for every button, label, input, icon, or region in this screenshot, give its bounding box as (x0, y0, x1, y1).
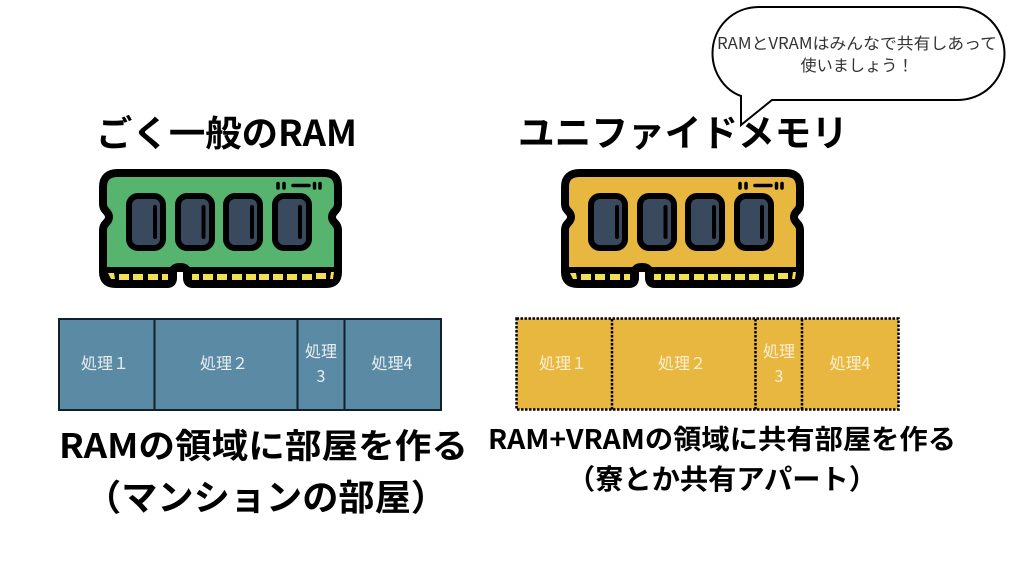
label: process 1: 処理１ (81, 350, 129, 374)
label: shared process 3: 処理 (763, 338, 795, 362)
icon: yellow RAM module (565, 173, 800, 284)
label: process 3: 3 (317, 363, 325, 387)
panel: shared process partitions (516, 318, 898, 410)
caption: RAM: RAMの領域に部屋を作る (59, 419, 468, 468)
caption: unified memory (488, 418, 956, 498)
callout: speech bubble (712, 7, 1004, 125)
caption: RAM (59, 419, 468, 521)
label: process 4: 処理4 (372, 350, 413, 374)
heading: general RAM: ごく一般のRAM (96, 105, 357, 157)
caption: RAM: （マンションの部屋） (85, 469, 447, 521)
panel: RAM process partitions (59, 319, 441, 410)
label: shared process 3: 3 (775, 363, 783, 387)
callout: speech bubble: 使いましょう！ (800, 52, 914, 76)
label: process 3: 処理 (305, 338, 337, 362)
caption: unified memory: RAM+VRAMの領域に共有部屋を作る (488, 418, 956, 457)
label: shared process 2: 処理２ (658, 350, 706, 374)
callout: speech bubble: RAMとVRAMはみんなで共有しあって (717, 30, 997, 54)
label: process 2: 処理２ (200, 350, 248, 374)
label: shared process 1: 処理１ (539, 350, 587, 374)
heading: unified memory: ユニファイドメモリ (518, 103, 848, 157)
icon: green RAM module (103, 173, 338, 284)
caption: unified memory: （寮とか共有アパート） (567, 458, 877, 498)
label: shared process 4: 処理4 (830, 350, 871, 374)
